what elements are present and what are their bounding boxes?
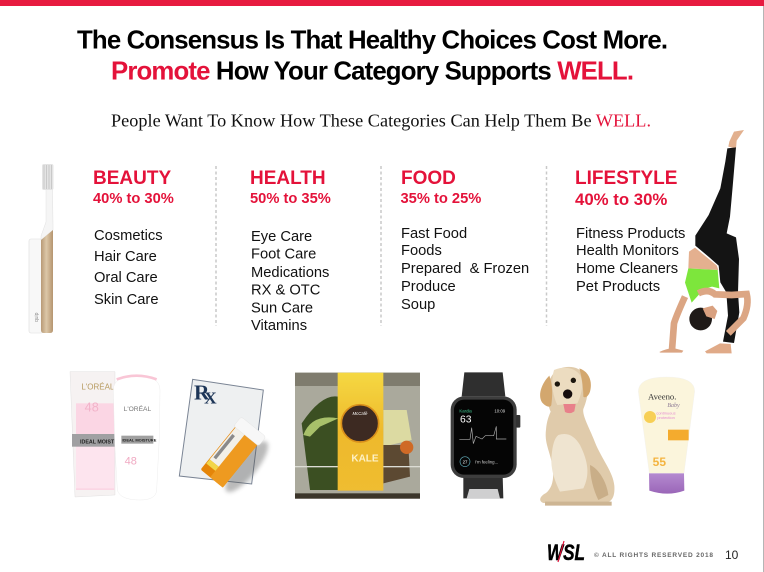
list: food: Produce <box>401 279 456 295</box>
icon: toothbrush: quip <box>34 312 40 322</box>
heading: food: FOOD <box>401 168 456 189</box>
product: Aveeno sunscreen: 55 <box>653 455 666 469</box>
product: L'Oreal lotion: 48 <box>85 400 99 414</box>
list: food: Soup <box>401 297 435 313</box>
product: Aveeno sunscreen: Aveeno. <box>648 391 676 401</box>
title: Promote How Your Category Supports WELL. <box>111 58 634 86</box>
product: golden retriever <box>540 367 614 506</box>
list: lifestyle: Pet Products <box>576 279 660 295</box>
subtitle: People Want To Know How These Categories Can Help Them Be WELL. <box>111 110 651 130</box>
list: health: Vitamins <box>251 318 307 334</box>
product: L'Oreal lotion: L'ORÉAL <box>81 382 115 391</box>
list: lifestyle: Fitness Products <box>576 226 685 242</box>
panel: health <box>250 168 331 334</box>
list: health: Foot Care <box>251 246 316 262</box>
list: food: Foods <box>401 243 442 259</box>
product: smartwatch: 63 <box>460 414 472 425</box>
page number: 10 <box>725 548 739 562</box>
list: lifestyle <box>576 226 685 295</box>
product: L'Oreal lotion: 48 <box>125 456 137 468</box>
illustration: yoga woman <box>659 130 747 353</box>
list: beauty: Oral Care <box>94 270 158 286</box>
heading: health: HEALTH <box>250 168 326 189</box>
logo: WSL: WSL <box>547 540 585 565</box>
list: beauty: Skin Care <box>94 292 158 308</box>
range: health: 50% to 35% <box>250 191 331 207</box>
product: RX pad and pill bottle <box>179 379 274 498</box>
top red bar <box>0 0 764 6</box>
list: health: RX & OTC <box>251 282 321 298</box>
divider 1 <box>215 166 217 326</box>
list: beauty: Cosmetics <box>94 228 163 244</box>
product: Aveeno sunscreen: protection <box>657 415 675 420</box>
icon: toothbrush <box>29 164 54 333</box>
list: beauty: Hair Care <box>94 249 157 265</box>
list: lifestyle: Health Monitors <box>576 243 679 259</box>
range: food: 35% to 25% <box>400 191 481 207</box>
copyright: © ALL RIGHTS RESERVED 2018 <box>594 551 713 559</box>
list: food: Prepared & Frozen <box>401 261 529 277</box>
product: smartwatch: 27 <box>463 459 468 464</box>
title: The Consensus Is That Healthy Choices Cost More. <box>77 26 668 54</box>
panel: lifestyle <box>575 168 685 295</box>
product: smartwatch: I'm feeling... <box>475 459 498 464</box>
heading: lifestyle: LIFESTYLE <box>575 168 677 189</box>
product: L'Oreal lotion: IDEAL MOISTURE <box>80 439 126 445</box>
divider 3 <box>546 166 548 326</box>
list: food <box>401 226 529 313</box>
product: RX pad and pill bottle: X <box>204 388 217 407</box>
product: smartwatch: Kardia <box>459 408 472 413</box>
list: health <box>251 229 329 334</box>
product: salad container <box>295 373 420 499</box>
list: health: Sun Care <box>251 300 313 316</box>
product: L'Oreal lotion: L'ORÉAL <box>124 404 152 413</box>
product: Aveeno sunscreen: Baby <box>667 403 680 409</box>
list: health: Eye Care <box>251 229 312 245</box>
product: L'Oreal lotion <box>70 372 160 500</box>
heading: beauty: BEAUTY <box>93 168 171 189</box>
list: health: Medications <box>251 265 329 281</box>
product: L'Oreal lotion: IDEAL MOISTURE <box>122 437 157 442</box>
panel: food <box>400 168 529 313</box>
range: lifestyle: 40% to 30% <box>575 190 667 209</box>
product: salad container: McCafé <box>353 411 368 416</box>
title <box>77 26 668 86</box>
panel: beauty <box>93 168 174 308</box>
divider 2 <box>380 166 382 326</box>
product: Aveeno sunscreen: continuous <box>656 410 676 415</box>
range: beauty: 40% to 30% <box>93 191 174 207</box>
list: lifestyle: Home Cleaners <box>576 261 678 277</box>
product: Aveeno sunscreen <box>638 377 695 494</box>
product: RX pad and pill bottle: R <box>194 380 209 404</box>
list: food: Fast Food <box>401 226 467 242</box>
product: smartwatch <box>451 372 520 498</box>
list: beauty <box>94 228 163 308</box>
product: salad container: KALE <box>351 453 379 464</box>
product: smartwatch: 10:09 <box>494 408 506 413</box>
